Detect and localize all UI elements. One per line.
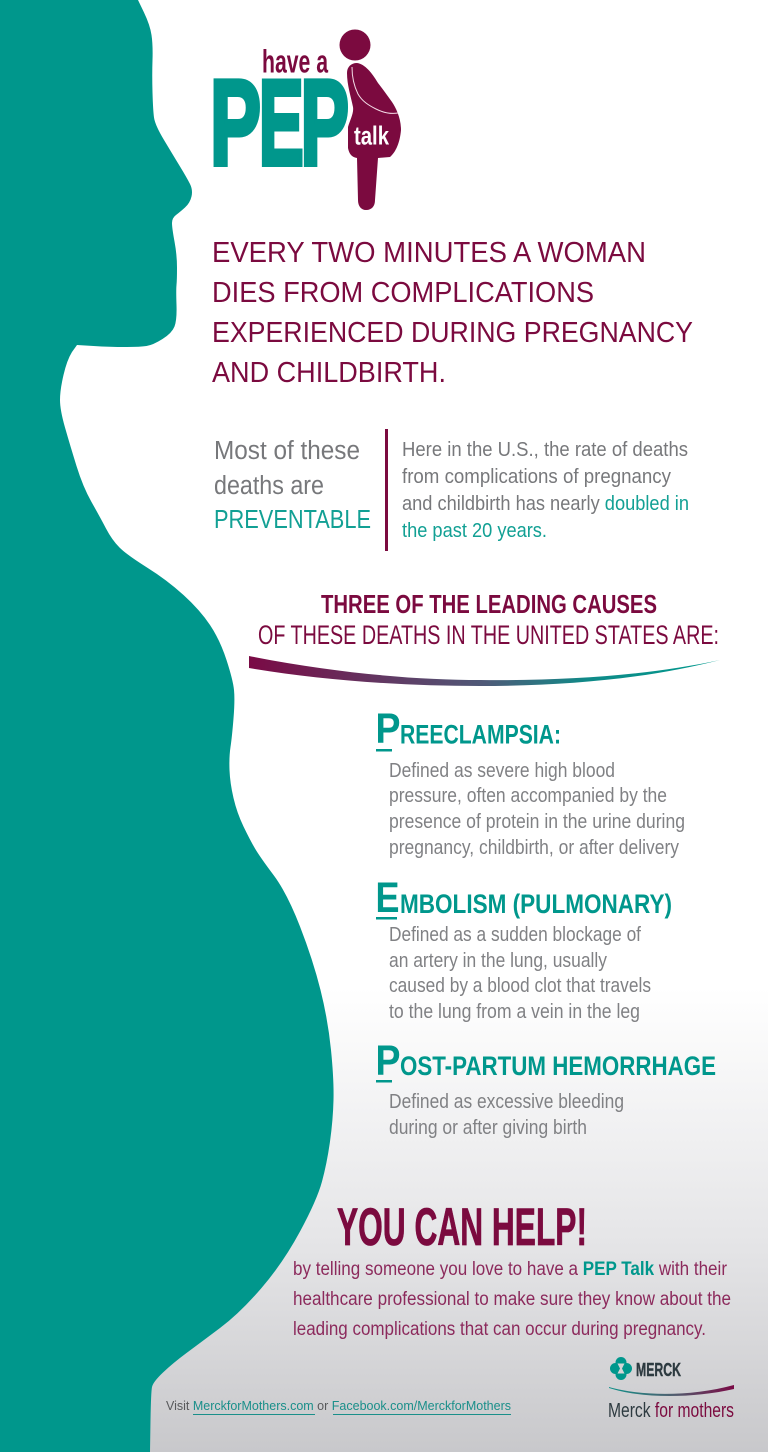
description: post-partum hemorrhage: [389, 1091, 624, 1139]
logo text: PEP: P: [300, 54, 349, 190]
heading: embolism: MBOLISM (PULMONARY): [400, 889, 672, 919]
cause: post-partum hemorrhage: [376, 1037, 716, 1139]
call to action: by telling someone you love to have a PEP Talk with their: [293, 1259, 728, 1280]
section heading: THREE OF THE LEADING CAUSES: [321, 589, 657, 619]
section heading: [258, 589, 719, 650]
description: preeclampsia: presence of protein in the urine during: [389, 811, 685, 833]
Merck for mothers logo: [608, 1357, 734, 1422]
logo text: PEP: E: [259, 54, 304, 190]
icon: Merck emblem: [610, 1357, 632, 1380]
U.S. rate statement: from complications of pregnancy: [402, 466, 671, 488]
call to action: leading complications that can occur during pregnancy.: [293, 1319, 706, 1340]
description: preeclampsia: [389, 760, 685, 859]
logo text: MERCK: MERCK: [636, 1360, 681, 1380]
logo text: talk: talk: [354, 120, 389, 150]
icon: pregnant figure: [340, 30, 401, 210]
website links: Visit MerckforMothers.com or Facebook.com/MerckforMothers: [166, 1398, 511, 1413]
preventable statement: deaths are: [214, 472, 324, 500]
swoosh divider: [249, 656, 720, 686]
U.S. rate statement: and childbirth has nearly doubled in: [402, 493, 689, 515]
U.S. rate statement: Here in the U.S., the rate of deaths: [402, 439, 688, 461]
description: embolism: an artery in the lung, usually: [389, 950, 607, 972]
heading: preeclampsia: REECLAMPSIA:: [400, 720, 561, 750]
headline: AND CHILDBIRTH.: [212, 357, 446, 389]
U.S. rate statement: [402, 439, 689, 542]
preventable statement: Most of these: [214, 437, 360, 465]
logo text: Merck for mothers: Merck for mothers: [608, 1400, 734, 1422]
cause: embolism: [376, 874, 672, 1023]
headline: EVERY TWO MINUTES A WOMAN: [212, 237, 646, 269]
heading: post-partum hemorrhage: [376, 1037, 716, 1085]
logo text: PEP: [210, 54, 349, 190]
heading: embolism: E: [376, 874, 400, 922]
description: embolism: caused by a blood clot that travels: [389, 975, 651, 997]
description: embolism: to the lung from a vein in the leg: [389, 1001, 640, 1023]
headline: EXPERIENCED DURING PREGNANCY: [212, 317, 693, 349]
logo text: have a: have a: [262, 44, 328, 80]
headline: DIES FROM COMPLICATIONS: [212, 277, 594, 309]
description: preeclampsia: pressure, often accompanied by the: [389, 785, 667, 807]
heading: preeclampsia: P: [376, 705, 400, 753]
description: preeclampsia: pregnancy, childbirth, or after delivery: [389, 837, 679, 859]
description: embolism: [389, 924, 651, 1023]
cause: preeclampsia: [376, 705, 685, 859]
U.S. rate statement: the past 20 years.: [402, 520, 547, 542]
description: embolism: Defined as a sudden blockage of: [389, 924, 641, 946]
heading: post-partum hemorrhage: P: [376, 1037, 400, 1085]
call to action: [293, 1259, 731, 1340]
PEP talk logo: [210, 30, 401, 210]
headline: [212, 237, 693, 389]
description: preeclampsia: Defined as severe high blood: [389, 760, 615, 782]
pregnant woman silhouette: [0, 0, 334, 1452]
logo text: PEP: P: [210, 54, 261, 190]
description: post-partum hemorrhage: Defined as excessive bleeding: [389, 1091, 624, 1113]
heading: preeclampsia: [376, 705, 561, 753]
description: post-partum hemorrhage: during or after giving birth: [389, 1117, 587, 1139]
you can help heading: YOU CAN HELP!: [337, 1198, 587, 1257]
preventable statement: [214, 437, 371, 534]
logo swoosh: [609, 1385, 734, 1396]
preventable statement: PREVENTABLE: [214, 506, 371, 534]
call to action: healthcare professional to make sure they know about the: [293, 1289, 731, 1310]
heading: embolism: [376, 874, 672, 922]
